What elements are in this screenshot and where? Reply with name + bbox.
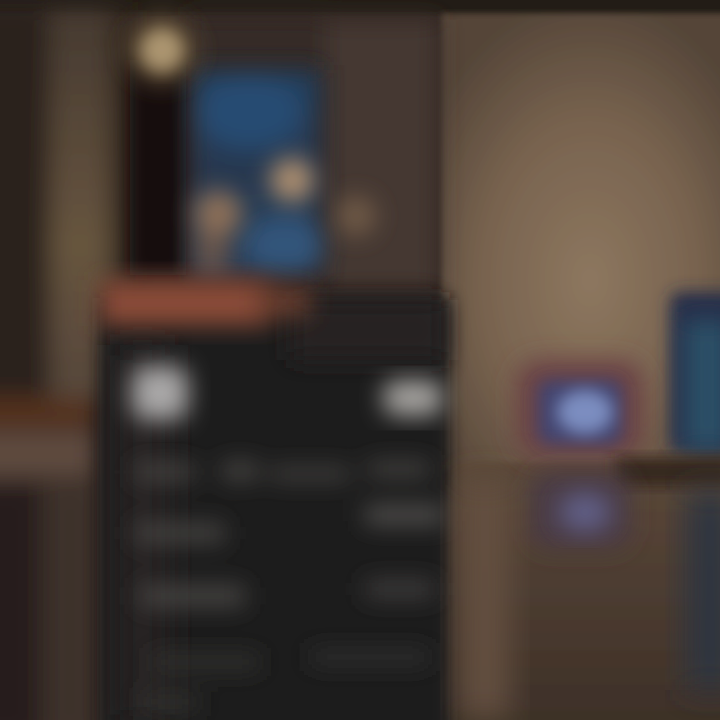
warm light: top lamp xyxy=(128,16,196,84)
distant device: small purple frame xyxy=(516,360,644,458)
floor reflections xyxy=(460,472,720,720)
back wall brown panel xyxy=(186,15,438,290)
dark vertical pillar xyxy=(130,60,186,275)
warm light: poster bulbs xyxy=(194,158,376,274)
dark phone panel xyxy=(100,298,450,720)
table edge at right xyxy=(615,458,720,486)
app icon: right white blob xyxy=(383,380,443,416)
blue poster xyxy=(192,70,325,275)
left wall columns xyxy=(0,0,132,720)
distant device: blue phone at right xyxy=(670,292,720,452)
red header band xyxy=(100,280,310,326)
app icon: left white blob xyxy=(132,366,188,420)
blurred list rows xyxy=(135,462,445,709)
